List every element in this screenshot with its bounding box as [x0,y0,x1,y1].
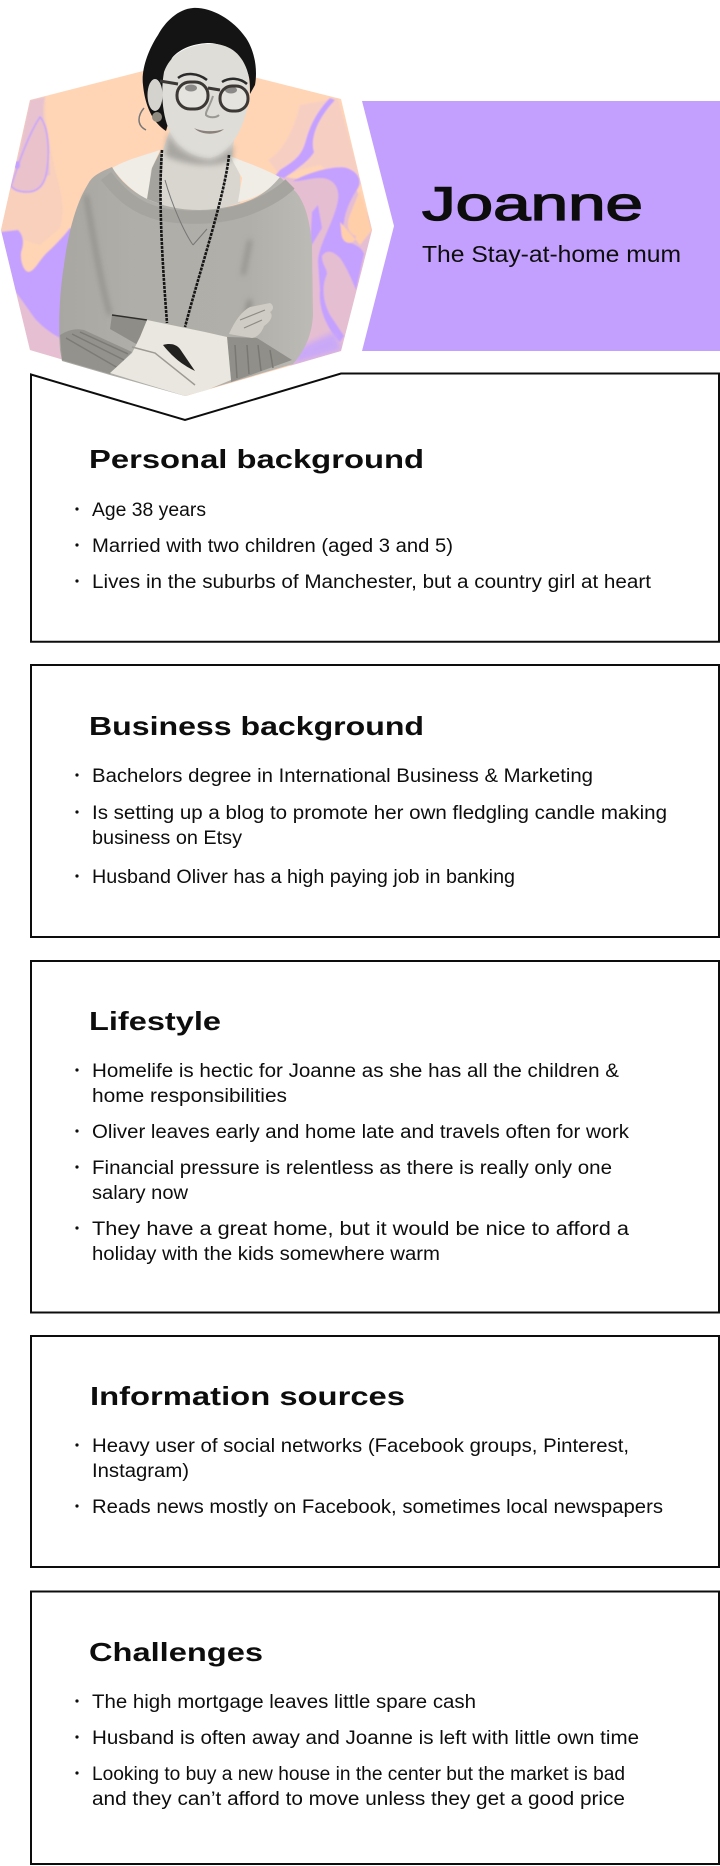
name: Joanne [422,177,643,230]
bullet list: Age 38 years [92,500,206,521]
heading: Personal background [89,444,424,474]
bullet list: Looking to buy a new house in the center but the market is bad [92,1764,625,1785]
white shirt collar [112,150,281,204]
sweater neckline rib [106,176,290,217]
panel: business background [31,665,719,937]
purple name banner [362,101,720,351]
panel: lifestyle [31,961,719,1312]
bullet list: Heavy user of social networks (Facebook groups, Pinterest, [92,1436,629,1457]
bullet list: and they can’t afford to move unless they get a good price [92,1789,625,1810]
heading: Challenges [89,1637,263,1667]
bullet list: Oliver leaves early and home late and travels often for work [92,1122,630,1143]
bullet list: Reads news mostly on Facebook, sometimes local newspapers [92,1497,663,1518]
bullet list: The high mortgage leaves little spare cash [92,1692,476,1713]
necklace [161,150,229,327]
panel: challenges [31,1592,719,1864]
bullet list: salary now [92,1183,188,1204]
face [162,44,249,158]
bullet list [75,766,667,888]
hair [143,8,256,131]
bullet list: Husband Oliver has a high paying job in banking [92,867,515,888]
marble octagon background [0,55,375,400]
bullet list: They have a great home, but it would be nice to afford a [92,1219,629,1240]
bullet list: Husband is often away and Joanne is left with little own time [92,1728,639,1749]
heading: Business background [89,711,424,741]
bullet list: home responsibilities [92,1086,287,1107]
crossed arms [60,303,292,396]
portrait of Joanne [59,8,313,396]
bullet list: Homelife is hectic for Joanne as she has all the children & [92,1061,619,1082]
earring and ear [139,79,162,130]
neck and chest [146,128,240,212]
bullet list: business on Etsy [92,828,243,849]
bullet list: Instagram) [92,1461,189,1482]
bullet list [75,1436,663,1518]
panel: personal background [31,374,719,642]
grey sweater [59,167,313,396]
bullet list: Is setting up a blog to promote her own fledgling candle making [92,803,667,824]
glasses and facial features [160,74,248,134]
bullet list: Lives in the suburbs of Manchester, but a country girl at heart [92,572,652,593]
heading: Lifestyle [89,1006,221,1036]
bullet list: Married with two children (aged 3 and 5) [92,536,453,557]
bullet list [75,1692,639,1810]
panel: information sources [31,1336,719,1567]
role subtitle: The Stay-at-home mum [422,241,681,267]
bullet list: holiday with the kids somewhere warm [92,1244,440,1265]
bullet list: Financial pressure is relentless as there is really only one [92,1158,612,1179]
heading: Information sources [90,1381,405,1411]
neck shadow [165,132,234,165]
bullet list: Bachelors degree in International Business & Marketing [92,766,593,787]
bullet list [75,500,652,593]
bullet list [75,1061,630,1265]
sweater fold shadows [86,195,250,320]
